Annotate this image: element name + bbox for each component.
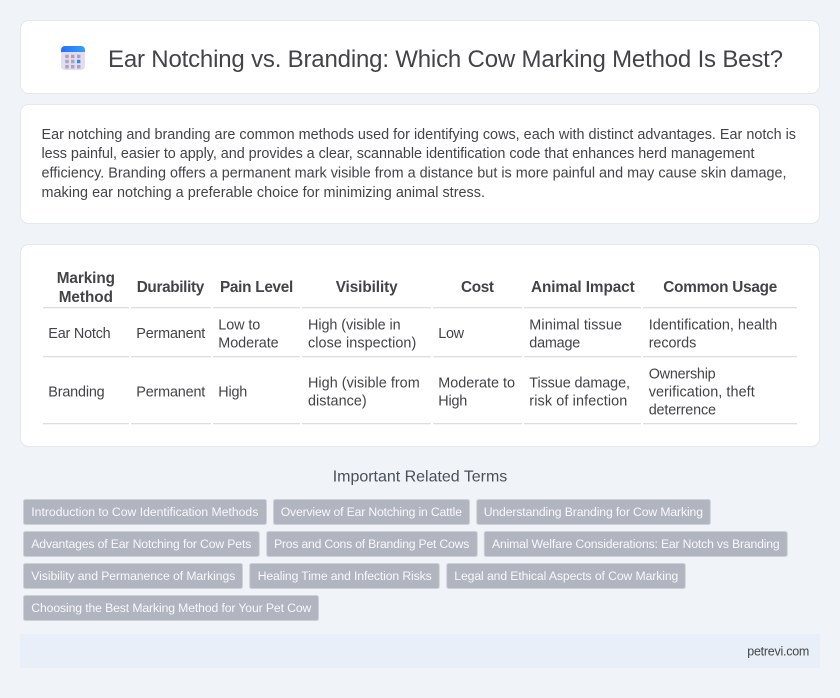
table header row: Common Usage [663,279,777,296]
tag: Animal Welfare Considerations: Ear Notch vs Branding [492,537,780,551]
table row: ear notch: damage [529,335,580,351]
panel: comparison table [20,244,820,446]
tag: Pros and Cons of Branding Pet Cows [274,537,469,551]
tag: Introduction to Cow Identification Methods [31,505,258,519]
tag: Advantages of Ear Notching for Cow Pets [31,537,251,551]
table row: branding: distance) [308,393,367,409]
table row: branding: High [218,384,247,400]
tag [24,564,242,588]
title: Ear Notching vs. Branding: Which Cow Marking Method Is Best? [108,46,783,73]
tag [267,532,477,556]
table row: branding: verification, theft [649,384,755,400]
related terms heading: Important Related Terms [333,469,507,486]
table row: ear notch: High (visible in [308,317,401,333]
tag [24,532,259,556]
table header row: Pain Level [220,279,293,296]
table row: ear notch: Low to [218,317,260,333]
table row: branding: Permanent [136,384,205,400]
tag: Healing Time and Infection Risks [258,569,432,583]
table row: branding: Tissue damage, [529,375,630,391]
intro paragraph: less painful, easier to apply, and provides a clear, scannable identification code that enhances herd management [42,146,754,162]
table row: ear notch: Low [438,326,465,342]
tag: Visibility and Permanence of Markings [31,569,235,583]
related terms tags [24,500,787,620]
tag [24,596,318,620]
table header row: Durability [137,279,205,296]
icon: calendar [61,46,85,70]
footer source: petrevi.com [747,644,809,658]
table header row: Cost [461,279,494,296]
tag: Understanding Branding for Cow Marking [484,505,703,519]
table row: ear notch: Moderate [218,335,279,351]
table row: ear notch: Minimal tissue [529,317,622,333]
tag: Choosing the Best Marking Method for Your Pet Cow [31,601,311,615]
table row: branding [48,366,755,418]
intro paragraph: Ear notching and branding are common methods used for identifying cows, each with distinct advantages. Ear notch is [42,127,796,143]
table header row: Visibility [336,279,398,296]
table row: ear notch: Permanent [136,326,205,342]
table row: ear notch: Identification, health [649,317,777,333]
tag [250,564,439,588]
table row: branding: risk of infection [529,393,627,409]
tag [24,500,266,524]
table row: ear notch: records [649,335,696,351]
table row: branding: Moderate to [438,375,515,391]
footer bar [20,634,820,668]
intro paragraph: making ear notching a preferable choice for minimizing animal stress. [42,185,485,201]
table row: ear notch: close inspection) [308,335,416,351]
tag [274,500,470,524]
table row: ear notch [48,317,777,351]
table header row [57,270,777,306]
table header row: Method [59,289,113,306]
table row: branding: Branding [48,384,105,400]
tag [484,532,787,556]
table row: branding: High [438,393,467,409]
table row: branding: deterrence [649,402,716,418]
table header row: Marking [57,270,115,287]
intro paragraph: efficiency. Branding offers a permanent mark visible from a distance but is more painful and may cause skin damage, [42,166,786,182]
table row: branding: Ownership [649,366,716,382]
tag [477,500,710,524]
panel: introduction [20,104,820,224]
tag: Overview of Ear Notching in Cattle [281,505,462,519]
table row: ear notch: Ear Notch [48,326,111,342]
tag: Legal and Ethical Aspects of Cow Marking [454,569,678,583]
intro paragraph [42,127,796,201]
table row: branding: High (visible from [308,375,420,391]
table header row: Animal Impact [531,279,635,296]
header panel [20,20,820,94]
tag [447,564,685,588]
